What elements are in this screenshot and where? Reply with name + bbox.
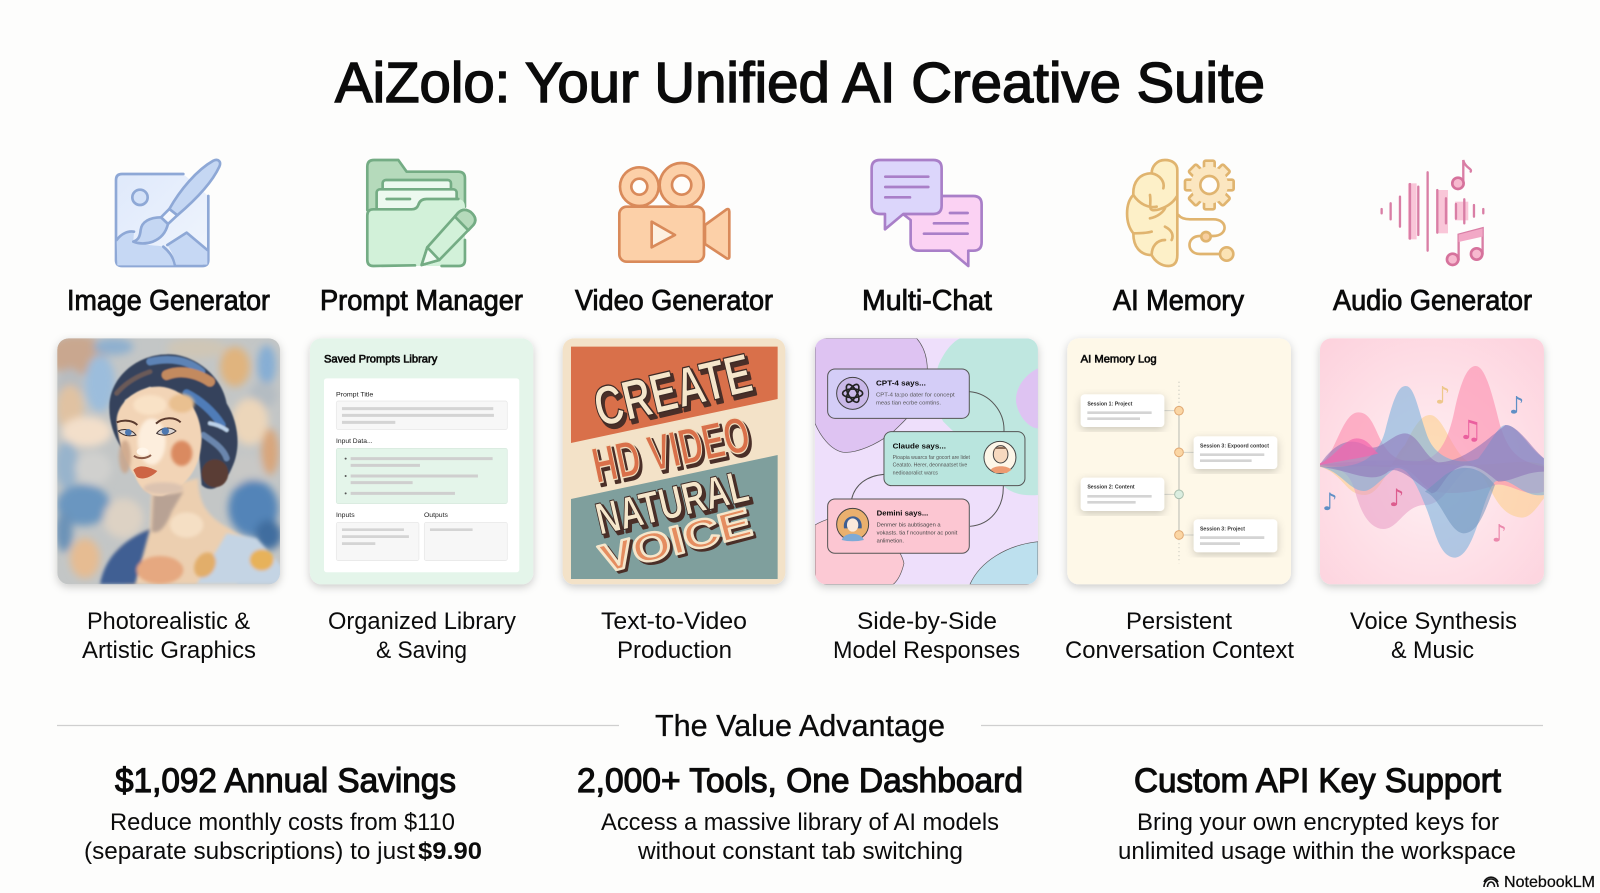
field: inputs [336, 512, 419, 561]
bubble: gpt-4: CPT-4 says... [876, 379, 926, 388]
bubble: gemini: vokasts. tia f ncountnor ac ponit [877, 531, 958, 537]
caption: multi-chat [833, 608, 1020, 664]
music notes: ♫ [1458, 415, 1482, 446]
value: tools: without constant tab switching [637, 838, 963, 865]
music notes: ♪ [1509, 391, 1524, 419]
field: prompt title [336, 391, 507, 430]
wave: magenta accent [1320, 438, 1378, 465]
panel: audio waves [1320, 338, 1544, 584]
poster headline: natural: NATURAL [591, 460, 753, 545]
value heading: $1,092 Annual Savings [115, 762, 456, 800]
bubble: gemini: anlimetion. [877, 538, 904, 544]
caption: prompt manager: & Saving [376, 637, 467, 664]
panel: saved prompts library [310, 338, 533, 584]
session card 1: Session 1: Project [1087, 401, 1132, 407]
caption: audio generator [1350, 608, 1517, 664]
music notes: ♪ [1389, 484, 1404, 512]
wave: blue [1320, 386, 1544, 558]
session card 1 [1081, 394, 1164, 427]
title: AiZolo: Your Unified AI Creative Suite [335, 51, 1265, 115]
caption: image generator [82, 608, 256, 664]
caption: video generator: Production [617, 637, 732, 664]
icon: video generator [619, 163, 729, 262]
neck and shoulders [128, 478, 244, 584]
icon: multi-chat [872, 160, 982, 266]
field: prompt title: Prompt Title [336, 391, 374, 398]
bubble: gemini: Denmer bis aubtisagen a [877, 523, 941, 529]
bubble: gpt-4: CPT-4 ta:po dater for concept [876, 393, 955, 399]
value: annual savings: $9.90 [418, 838, 482, 865]
session card 2: Session 3: Expoord contoct [1200, 443, 1269, 449]
wave: yellow [1320, 415, 1544, 518]
music notes [1322, 381, 1524, 548]
section heading: the value advantage: The Value Advantage [655, 708, 945, 743]
caption: multi-chat: Side-by-Side [857, 608, 997, 635]
bubble: claude: Pioapia wuarcs far gocort are lidet [893, 455, 970, 461]
caption: image generator: Photorealistic & [87, 608, 250, 635]
poster headline: hd video [587, 405, 757, 497]
label: prompt manager: Prompt Manager [320, 285, 523, 317]
caption: prompt manager: Organized Library [328, 608, 516, 635]
field: outputs: Outputs [424, 512, 448, 519]
bubble: claude: nedioaoralict warcs [893, 470, 938, 476]
wave: pink [1320, 366, 1544, 493]
caption: ai memory [1065, 608, 1294, 664]
field: outputs [424, 512, 507, 561]
field: input data: Input Data... [336, 438, 373, 445]
icon: ai memory [1127, 160, 1234, 266]
caption: prompt manager [328, 608, 516, 664]
poster headline: natural [591, 460, 756, 547]
bubble: gpt-4: meas tian ecrbe comtins. [876, 400, 941, 406]
bubble: claude: Claude says... [893, 441, 946, 450]
music notes: ♪ [1435, 381, 1450, 409]
poster headline: natural: NATURAL [593, 463, 756, 547]
value: api key support: unlimited usage within the workspace [1118, 838, 1516, 865]
wave: lower slate [1425, 468, 1495, 533]
caption: audio generator: & Music [1391, 637, 1474, 664]
value: tools: Access a massive library of AI models [601, 809, 999, 836]
value: tools [577, 762, 1023, 865]
session card 2 [1194, 436, 1277, 469]
music notes: ♪ [1322, 488, 1338, 516]
poster headline: create [588, 341, 760, 442]
caption: audio generator: Voice Synthesis [1350, 608, 1517, 635]
field: input data [336, 438, 507, 504]
panel: retro video poster [563, 338, 785, 584]
bubble: gemini [828, 499, 969, 553]
label: video generator: Video Generator [575, 285, 773, 317]
icon: audio generator [1382, 160, 1483, 265]
panel: ai memory log [1067, 338, 1291, 584]
panel title: Saved Prompts Library [324, 353, 438, 365]
poster headline: create: CREATE [590, 344, 760, 442]
poster headline: voice: VOICE [598, 503, 759, 584]
hair [109, 354, 238, 489]
icon: image generator [116, 160, 220, 266]
panel: multi-chat responses [815, 338, 1038, 584]
value heading: Custom API Key Support [1134, 762, 1502, 800]
bubble: claude [884, 432, 1025, 486]
session card 4: Session 3: Project [1200, 527, 1245, 533]
value: api key support [1118, 762, 1516, 865]
value: api key support: Bring your own encrypted keys for [1137, 809, 1499, 836]
panel: painted portrait [47, 335, 283, 584]
caption: video generator: Text-to-Video [601, 608, 747, 635]
value: annual savings: (separate subscriptions) to just [84, 838, 415, 865]
label: image generator: Image Generator [67, 285, 270, 317]
caption: multi-chat: Model Responses [833, 637, 1020, 664]
session card 3: Session 2: Content [1087, 485, 1135, 491]
poster headline: hd video: HD VIDEO [590, 408, 757, 497]
poster headline: hd video: HD VIDEO [587, 405, 755, 494]
notebooklm watermark: NotebookLM [1504, 874, 1595, 891]
panel title: AI Memory Log [1081, 353, 1157, 365]
bubble: claude: Ceatato. Herer, deonnaatset tive [893, 463, 967, 469]
face [117, 387, 202, 496]
session card 4 [1194, 519, 1277, 552]
label: ai memory: AI Memory [1113, 285, 1244, 317]
value: annual savings [84, 762, 482, 865]
wave: lower pink [1322, 465, 1445, 529]
caption: ai memory: Persistent [1126, 608, 1232, 635]
icon: prompt manager [367, 160, 475, 266]
session card 3 [1081, 478, 1164, 511]
music notes: ♪ [1492, 520, 1507, 548]
caption: video generator [601, 608, 747, 664]
wave: violet center [1320, 425, 1544, 493]
eyes and mouth [117, 418, 181, 425]
label: multi-chat: Multi-Chat [862, 285, 992, 317]
bubble: gpt-4 [828, 369, 969, 418]
clothing [100, 529, 283, 584]
value: annual savings: Reduce monthly costs from $110 [110, 809, 455, 836]
field: inputs: Inputs [336, 512, 355, 519]
label: audio generator: Audio Generator [1333, 285, 1532, 317]
poster headline: voice: VOICE [595, 500, 756, 582]
poster headline: create: CREATE [588, 341, 758, 439]
caption: image generator: Artistic Graphics [82, 637, 256, 664]
timeline [1164, 382, 1194, 563]
value heading: 2,000+ Tools, One Dashboard [577, 762, 1023, 800]
bubble: gemini: Demini says... [877, 509, 928, 518]
caption: ai memory: Conversation Context [1065, 637, 1294, 664]
